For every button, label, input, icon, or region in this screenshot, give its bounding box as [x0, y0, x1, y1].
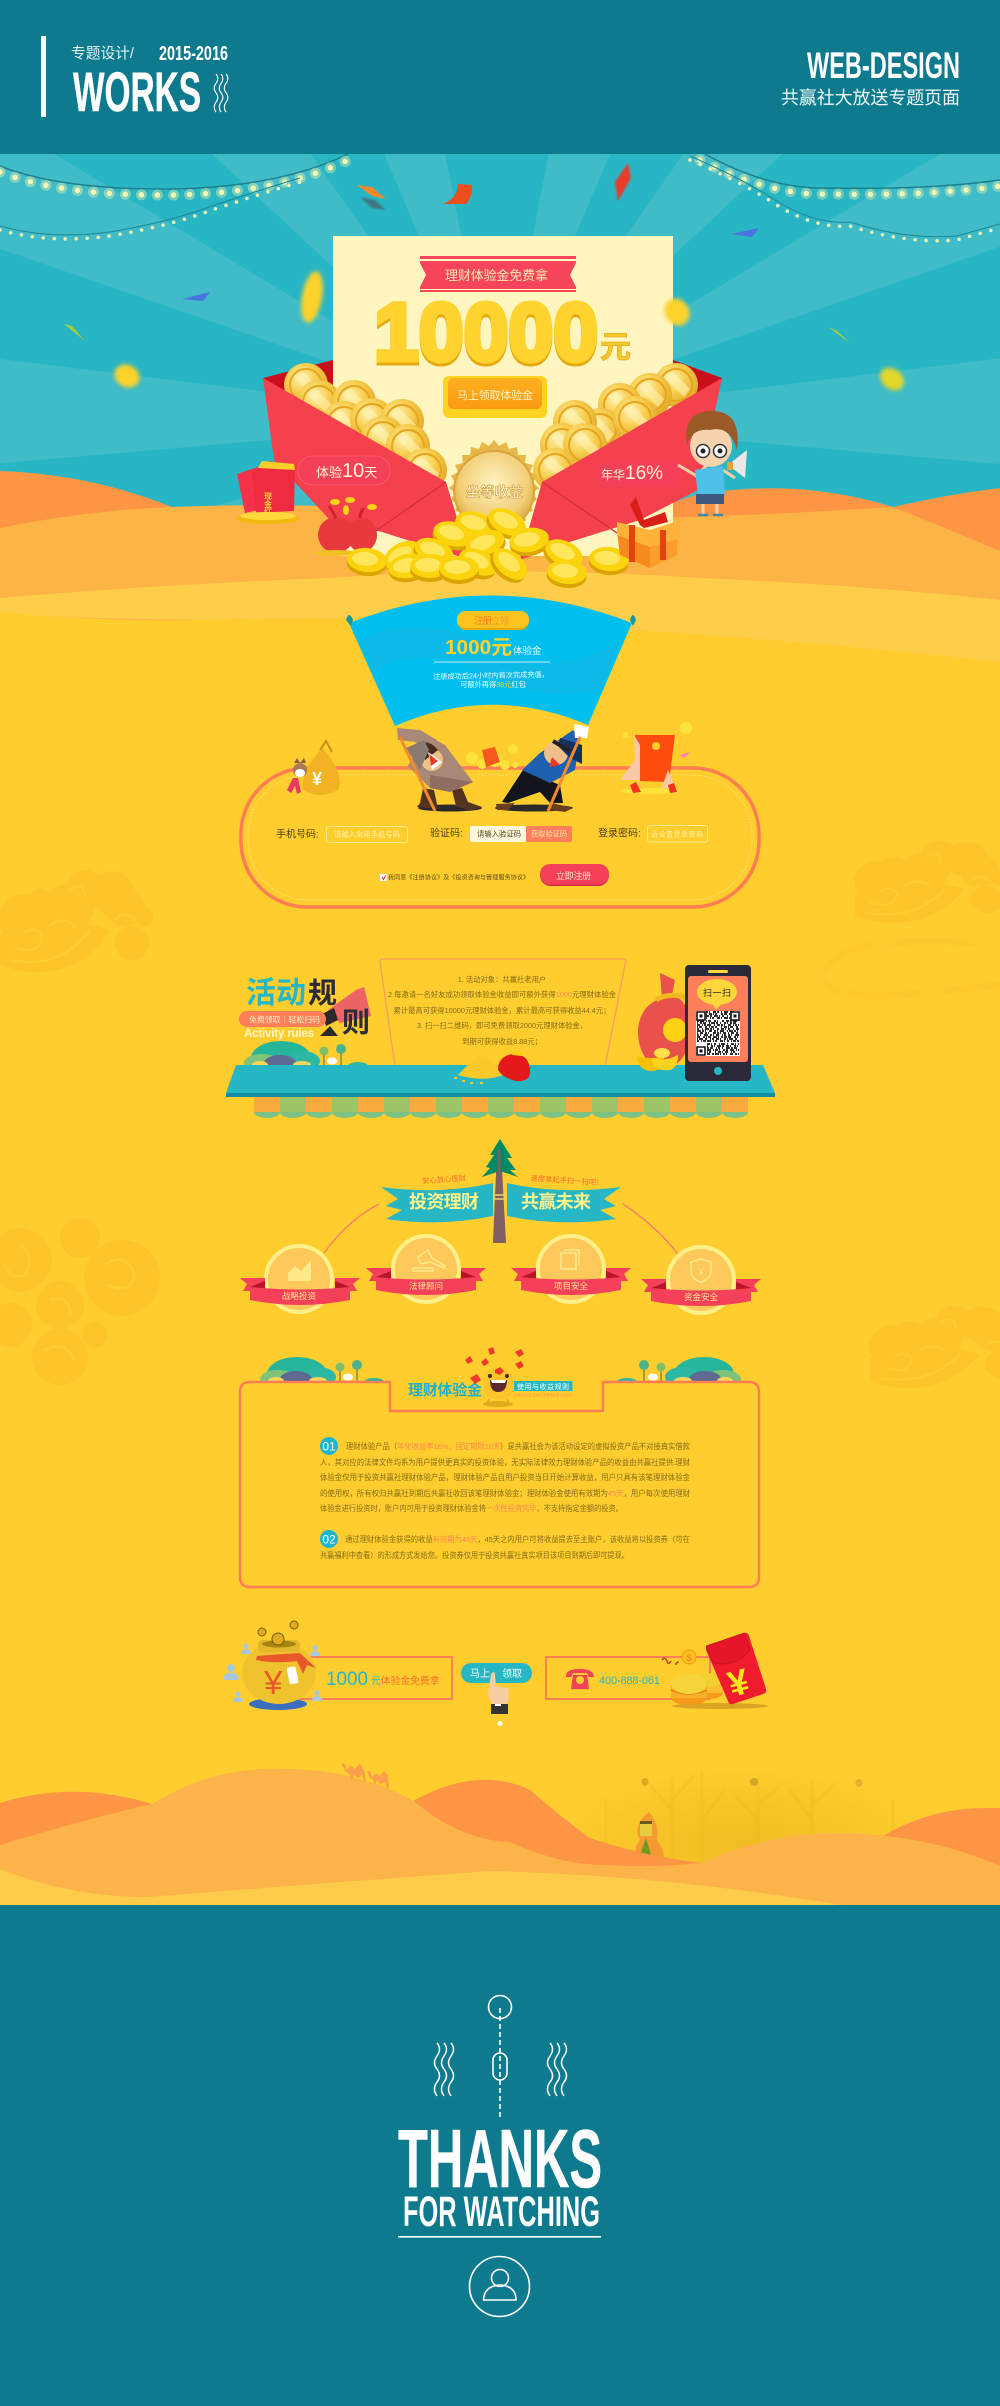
button: claim: 马上领取体验金 [457, 388, 533, 402]
button: register now [540, 864, 609, 886]
rules heading: 免费领取｜轻松扫码 [249, 1014, 320, 1024]
amount 1000 yuan [445, 637, 542, 659]
pill: 16 percent [596, 460, 682, 487]
QR code [696, 1011, 740, 1056]
rules heading: 规 [308, 977, 337, 1010]
illustration: phone with QR code [685, 965, 751, 1081]
illustration: gift box [617, 497, 681, 568]
pill: register: 注册立领 [474, 615, 509, 627]
banner right: 共赢未来 [521, 1191, 591, 1212]
medallion: fund safety: ¥ [697, 1267, 704, 1277]
bushes [244, 1041, 368, 1075]
box: phone [546, 1657, 710, 1699]
thanks heading: THANKS [398, 2112, 602, 2205]
bushes left [260, 1357, 384, 1391]
field: password [598, 826, 708, 842]
box: 1000 yuan free: 元体验金免费拿 [371, 1674, 440, 1687]
illustration: red money bag [638, 973, 690, 1068]
big amount 10000: 元 [600, 330, 631, 365]
pill: 10 days [298, 456, 390, 485]
bushes right [617, 1357, 741, 1391]
big amount 10000: 10000 [374, 290, 598, 381]
rules copy: 1. 活动对象：共赢社老用户 [458, 975, 546, 984]
experience frame [240, 1382, 759, 1587]
dot [498, 1721, 502, 1726]
field: password: 登录密码: [598, 826, 641, 840]
illustration: policeman holding flag [495, 724, 589, 812]
illustration: gold grains and purse [454, 1047, 530, 1083]
envelope front right [520, 378, 722, 560]
button: claim now [461, 1663, 532, 1683]
illustration: gold ingots [637, 1048, 678, 1071]
decorative clouds [0, 841, 1000, 1388]
illustration: coins and red packet: ¥ [723, 1660, 753, 1705]
section: invest and win [240, 1139, 761, 1313]
tag: usage rules: 使用与收益规则 [517, 1382, 569, 1391]
footer band [0, 1905, 1000, 2406]
medallion: fund safety: 资金安全 [684, 1292, 718, 1302]
medallion: strategy: 战略投资 [282, 1291, 316, 1301]
section: activity rules [226, 959, 775, 1118]
string lights left [0, 154, 348, 239]
medallion: strategy [240, 1246, 360, 1312]
paragraph 01 [320, 1441, 690, 1513]
box: 1000 yuan free [300, 1657, 452, 1699]
banner tips [346, 615, 636, 626]
medallion: legal [366, 1236, 486, 1302]
form fields [276, 826, 708, 886]
bottom dunes [0, 1769, 1000, 1905]
icon: waves left [434, 2043, 454, 2096]
cream card [333, 236, 673, 556]
paragraph 01: 体验金仅用于投资共赢社理财体验产品，理财体验产品自用户投资当日开始计算收益，用户只具有该笔理财体验金 [320, 1472, 690, 1482]
illustration: small red packets [236, 461, 300, 524]
field: verification code: 获取验证码 [531, 830, 567, 838]
envelope front left [263, 378, 470, 560]
form frame [241, 768, 759, 907]
header subtitle: 共赢社大放送专题页面 [781, 87, 960, 108]
connector arcs [324, 1204, 678, 1254]
header title WORKS: WORKS [73, 60, 201, 123]
counter table [226, 1065, 775, 1097]
banner left [381, 1183, 493, 1222]
seal: guaranteed returns [449, 440, 539, 536]
header label: topic design: 专题设计/ [71, 45, 135, 62]
rules copy [388, 975, 617, 1046]
blurred flying coins [110, 270, 908, 395]
experience title: 理财体验金 [408, 1381, 482, 1399]
amount 1000 yuan: 体验金 [513, 645, 542, 657]
rules copy: 到期可获得收益8.88元； [462, 1037, 542, 1046]
paragraph 01: 的使用权，所有权归共赢社到期后共赢社收回该笔理财体验金；理财体验金使用有效期为45天，用户每次使用理财 [320, 1488, 690, 1498]
field: verification code: 验证码: [430, 826, 463, 840]
bottom forest [568, 1740, 918, 1880]
coin pile left [284, 363, 447, 492]
ribbon: card heading [420, 256, 576, 292]
medallion: legal: 法律顾问 [409, 1281, 443, 1291]
banner copy: 注册成功后24小时内首次完成充值， [433, 670, 549, 681]
illustration: coins and red packet [662, 1633, 768, 1709]
rules heading: Activity rules [244, 1028, 314, 1040]
amount 1000 yuan: 1000元 [445, 637, 512, 659]
banner right [507, 1183, 621, 1222]
illustration: gold money sack [224, 1621, 322, 1710]
icon: megaphone [320, 987, 371, 1036]
medallion: project safety: 项目安全 [554, 1281, 588, 1291]
banner copy: 可额外再得38元红包 [460, 680, 526, 689]
big amount 10000: 10000 [374, 287, 598, 378]
icon: scroll indicator [488, 1996, 512, 2118]
mascot with red packets [465, 1347, 524, 1407]
rules copy: 累计最高可获得10000元理财体验金，累计最高可获得收益44.4元； [394, 1006, 610, 1015]
paragraph 01: 理财体验产品（年化收益率16%，固定期限10天）是共赢社会为该活动设定的虚拟投资产品不对接真实借款 [346, 1441, 690, 1451]
field: password: 请设置登录密码 [651, 830, 703, 838]
badge 02: 02 [322, 1532, 336, 1546]
paragraph 01: 人，其对应的法律文件均系为用户提供更真实的投资体验，无实际法律效力理财体验产品的收益由共赢社提供.理财 [320, 1457, 690, 1467]
illustration: red lucky bag [313, 497, 377, 556]
illustration: small coins behind characters [466, 744, 518, 770]
big amount 10000: 10000 [374, 287, 598, 378]
section: experience gold [240, 1347, 759, 1587]
paragraph 02 [320, 1534, 690, 1560]
pill: 16 percent: 年华16% [601, 463, 663, 484]
illustration: horse and money bag: ¥ [312, 769, 322, 789]
rules copy: 2.每邀请一名好友成功领取体验金收益即可额外获得1000元理财体验金 [388, 990, 617, 999]
illustration: hand holding red packet [620, 722, 692, 794]
rules heading: 则 [342, 1007, 370, 1038]
rules panel [380, 959, 626, 1066]
icon: red phone [566, 1669, 594, 1689]
banner: register [346, 596, 636, 726]
hero background with rays [0, 154, 1000, 507]
coin pile right [533, 363, 698, 492]
speech bubble: 扫一扫 [703, 987, 731, 998]
header years: 2015-2016 [159, 43, 228, 65]
checkbox agreement: 我同意《注册协议》及《投资咨询与管理服务协议》 [388, 874, 529, 882]
for watching subheading: FOR WATCHING [403, 2188, 600, 2236]
illustration: woman in orange cloak [635, 1812, 664, 1861]
button: register now: 立即注册 [556, 870, 591, 881]
rule under heading [398, 2236, 601, 2238]
badge 01 [320, 1437, 338, 1455]
field: phone: 手机号码: [276, 828, 319, 840]
medallion: project safety [511, 1236, 631, 1302]
string lights right [690, 154, 1000, 241]
field: verification code: 请输入验证码 [477, 830, 521, 838]
field: verification code [430, 826, 572, 842]
button: claim [443, 376, 547, 418]
icon: pine tree [482, 1139, 518, 1243]
header accent bar [41, 36, 46, 117]
rules heading [239, 977, 371, 1040]
paragraph 01: 体验金进行投资时，账户内可用于投资理财体验金将一次性投资完毕，不支持指定金额的投资。 [320, 1503, 623, 1513]
illustration: camels [341, 1763, 389, 1788]
dunes behind envelope [0, 471, 1000, 662]
main yellow background [0, 612, 1000, 1905]
awning [254, 1097, 748, 1118]
illustration: gold coin pile [346, 503, 630, 590]
illustration: horse and money bag [287, 741, 340, 795]
tagline right: 速度拿起手扫一扫吧！ [530, 1173, 604, 1188]
icon: user [470, 2256, 530, 2316]
box: 1000 yuan free: 1000 [326, 1669, 368, 1690]
illustration: small red packets: 现金红包 [264, 492, 272, 524]
banner left: 投资理财 [409, 1192, 479, 1212]
badge 01: 01 [322, 1440, 336, 1454]
badge 02 [320, 1530, 338, 1548]
rules heading: 活动 [246, 977, 306, 1010]
confetti [64, 163, 850, 343]
header band [0, 0, 1000, 154]
rules copy: 3. 扫一扫二维码，即可免费领取2000元理财体验金， [417, 1021, 587, 1030]
field: phone: 请输入常用手机号码 [334, 830, 400, 839]
envelope crease lines [370, 482, 620, 535]
section: claim CTA [224, 1621, 768, 1726]
tag: usage rules [514, 1381, 572, 1391]
tag: finance experience gold: FINANCE EXPERIENCE GOLD [514, 1392, 572, 1398]
icon: pointing hand [488, 1672, 509, 1714]
illustration: boy with megaphone [678, 411, 747, 515]
ribbon: card heading: 理财体验金免费拿 [445, 268, 548, 283]
button: claim now: 领取 [502, 1667, 522, 1680]
envelope and card [263, 236, 722, 560]
envelope back flaps [263, 360, 722, 420]
tagline left: 安心放心理财 [422, 1173, 466, 1186]
button: claim now: 马上 [470, 1668, 490, 1680]
box: phone: 400-888-061 [599, 1675, 660, 1687]
medallion: fund safety [641, 1247, 761, 1313]
paragraph 02: 共赢福利中查看）的形成方式发给您。投资券仅用于投资共赢社真实项目该项目到期后即可提现。 [320, 1550, 629, 1560]
illustration: gold money sack: ¥ [263, 1664, 283, 1701]
seal: guaranteed returns: 坐等收益 [466, 484, 523, 500]
banner copy [433, 670, 549, 689]
icon: waves right [548, 2043, 566, 2096]
field: phone [276, 826, 408, 842]
illustration: detective holding flag [397, 728, 482, 812]
paragraph 02: 通过理财体验金获得的收益有效期为45天，45天之内用户可将收益提去至主账户，该收益将以投资券（可在 [345, 1534, 690, 1544]
pill: register [457, 611, 529, 630]
illustration: coins and red packet: $ [686, 1653, 692, 1663]
pill: 10 days: 体验10天 [316, 460, 377, 482]
icon: header waves [214, 74, 228, 112]
